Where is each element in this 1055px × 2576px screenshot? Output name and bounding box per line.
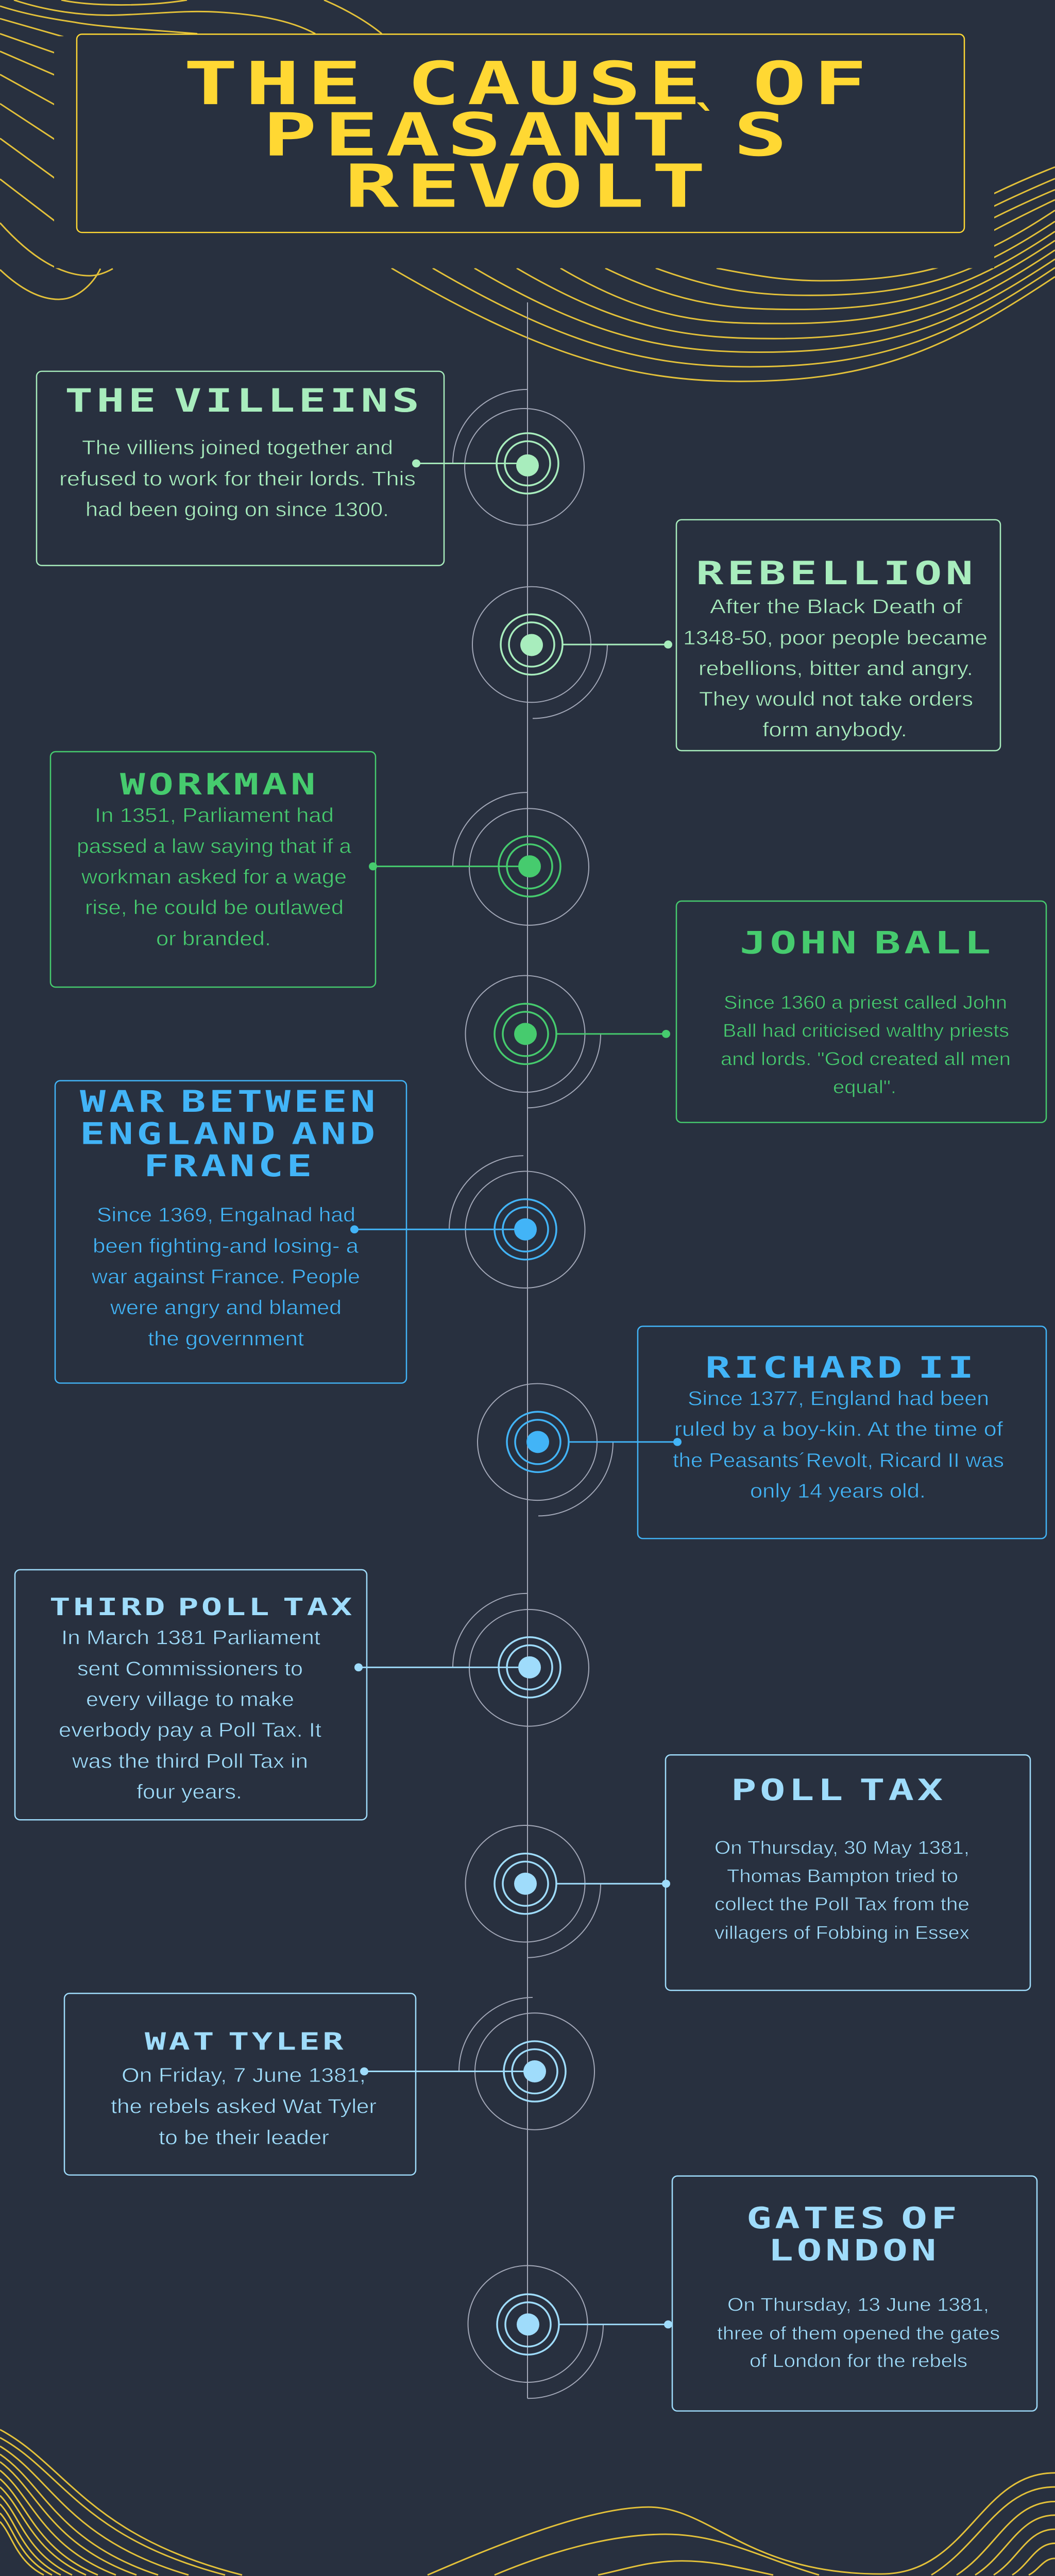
heading: poll tax: [731, 1773, 946, 1807]
text: richard ii: only 14 years old.: [750, 1480, 926, 1502]
text: workman: rise, he could be outlawed: [85, 896, 344, 919]
panel: richard ii: [638, 1326, 1046, 1538]
panel: the villeins: [37, 371, 444, 566]
title panel: [77, 34, 964, 232]
panel: third poll tax: [15, 1570, 367, 1820]
panel: workman: [50, 752, 376, 987]
node: wat tyler: [360, 1997, 594, 2130]
heading: rebellion: REBELLION: [696, 554, 977, 592]
node: the villeins: [412, 389, 584, 526]
text: rebellion: rebellions, bitter and angry.: [699, 657, 973, 680]
heading: the villeins: VILLEINS: [174, 382, 423, 419]
text: gates of london: three of them opened the gates: [717, 2323, 1000, 2344]
text: rebellion: form anybody.: [762, 719, 907, 741]
heading: third poll tax: TAX: [283, 1593, 355, 1621]
text: the villeins: had been going on since 1300.: [86, 498, 389, 521]
text: john ball: equal".: [833, 1076, 896, 1097]
heading: war between england and france: AND: [292, 1116, 379, 1151]
heading: workman: WORKMAN: [120, 768, 319, 802]
heading: john ball: BALL: [874, 925, 994, 961]
text: wat tyler: the rebels asked Wat Tyler: [111, 2095, 377, 2117]
node: john ball: [466, 976, 670, 1108]
title: REVOLT: [345, 152, 713, 221]
heading: richard ii: [705, 1350, 977, 1385]
node: richard ii: [478, 1384, 682, 1516]
heading: war between england and france: [80, 1084, 379, 1183]
text: poll tax: On Thursday, 30 May 1381,: [714, 1837, 969, 1858]
heading: third poll tax: [49, 1593, 355, 1621]
title: `: [692, 97, 725, 149]
text: war between england and france: were angry and blamed: [110, 1296, 342, 1319]
text: wat tyler: [111, 2064, 377, 2149]
heading: gates of london: GATES: [746, 2201, 889, 2235]
text: third poll tax: [59, 1626, 321, 1803]
text: third poll tax: four years.: [137, 1781, 242, 1803]
text: war between england and france: Since 1369, Engalnad had: [97, 1204, 355, 1226]
node: poll tax: [466, 1825, 670, 1958]
text: rebellion: 1348-50, poor people became: [683, 626, 988, 649]
heading: the villeins: THE: [65, 382, 160, 419]
heading: war between england and france: ENGLAND: [80, 1116, 279, 1151]
text: third poll tax: was the third Poll Tax in: [72, 1750, 308, 1773]
text: gates of london: of London for the rebels: [750, 2350, 967, 2371]
text: poll tax: collect the Poll Tax from the: [714, 1893, 969, 1914]
panel: rebellion: [676, 520, 1000, 751]
title: CAUSE: [407, 49, 708, 118]
panel: john ball: [676, 901, 1046, 1123]
text: the villeins: [59, 436, 416, 521]
text: richard ii: [673, 1387, 1004, 1502]
title: OF: [753, 49, 874, 118]
heading: gates of london: [746, 2201, 961, 2268]
heading: wat tyler: [145, 2028, 346, 2055]
text: richard ii: the Peasants´Revolt, Ricard II was: [673, 1449, 1004, 1472]
bottom decorative yellow contour lines: [0, 2430, 1055, 2575]
timeline axis: [527, 302, 528, 2398]
text: richard ii: Since 1377, England had been: [688, 1387, 989, 1410]
text: john ball: Ball had criticised walthy priests: [723, 1020, 1009, 1041]
heading: third poll tax: THIRD: [49, 1593, 168, 1621]
text: workman: [77, 804, 351, 950]
heading: richard ii: RICHARD: [705, 1350, 906, 1385]
panel: war between england and france: [55, 1081, 406, 1383]
heading: third poll tax: POLL: [178, 1593, 272, 1621]
title: PEASANT: [263, 100, 693, 170]
heading: war between england and france: BETWEEN: [181, 1084, 379, 1119]
heading: war between england and france: WAR: [80, 1084, 167, 1119]
text: poll tax: Thomas Bampton tried to: [727, 1866, 958, 1886]
panel: wat tyler: [64, 1993, 416, 2175]
text: poll tax: villagers of Fobbing in Essex: [714, 1922, 969, 1943]
text: poll tax: [714, 1837, 969, 1943]
heading: gates of london: LONDON: [768, 2233, 940, 2268]
text: war between england and france: war against France. People: [91, 1266, 360, 1288]
text: the villeins: The villiens joined together and: [82, 436, 393, 459]
heading: john ball: [740, 925, 994, 961]
text: john ball: and lords. "God created all men: [721, 1048, 1011, 1069]
text: third poll tax: sent Commissioners to: [77, 1657, 303, 1680]
text: john ball: Since 1360 a priest called John: [724, 992, 1007, 1013]
text: war between england and france: been fighting-and losing- a: [93, 1235, 359, 1258]
text: richard ii: ruled by a boy-kin. At the time of: [674, 1418, 1003, 1440]
node: third poll tax: [354, 1594, 589, 1726]
text: rebellion: After the Black Death of: [710, 596, 963, 618]
heading: the villeins: [65, 382, 423, 419]
text: war between england and france: [91, 1204, 360, 1350]
heading: poll tax: POLL: [731, 1773, 846, 1807]
heading: poll tax: TAX: [859, 1773, 946, 1807]
node: rebellion: [472, 587, 672, 719]
title: THE: [183, 49, 369, 118]
text: wat tyler: On Friday, 7 June 1381,: [122, 2064, 366, 2087]
title: S: [734, 100, 794, 170]
text: workman: passed a law saying that if a: [77, 835, 351, 857]
text: third poll tax: In March 1381 Parliament: [61, 1626, 320, 1649]
text: gates of london: On Thursday, 13 June 1381,: [727, 2294, 989, 2315]
text: workman: or branded.: [156, 927, 271, 950]
text: workman: workman asked for a wage: [81, 866, 347, 888]
node: workman: [369, 792, 589, 925]
text: third poll tax: every village to make: [86, 1688, 294, 1710]
text: rebellion: [683, 596, 988, 741]
text: workman: In 1351, Parliament had: [95, 804, 334, 827]
node: gates of london: [468, 2265, 672, 2398]
heading: john ball: JOHN: [740, 925, 860, 961]
panel: poll tax: [666, 1755, 1030, 1990]
text: john ball: [721, 992, 1011, 1097]
top decorative yellow contour lines: [0, 0, 1055, 381]
node: war between england and france: [350, 1156, 585, 1288]
heading: gates of london: OF: [901, 2201, 961, 2235]
heading: war between england and france: FRANCE: [144, 1149, 315, 1183]
heading: wat tyler: TYLER: [228, 2028, 346, 2055]
text: war between england and france: the government: [148, 1328, 304, 1350]
text: third poll tax: everbody pay a Poll Tax. It: [59, 1719, 321, 1741]
heading: richard ii: II: [918, 1350, 977, 1385]
text: gates of london: [717, 2294, 1000, 2371]
text: wat tyler: to be their leader: [159, 2127, 329, 2149]
text: the villeins: refused to work for their lords. This: [59, 468, 416, 490]
panel: gates of london: [672, 2176, 1037, 2411]
title: [183, 49, 874, 221]
text: rebellion: They would not take orders: [699, 688, 973, 710]
heading: wat tyler: WAT: [145, 2028, 217, 2055]
